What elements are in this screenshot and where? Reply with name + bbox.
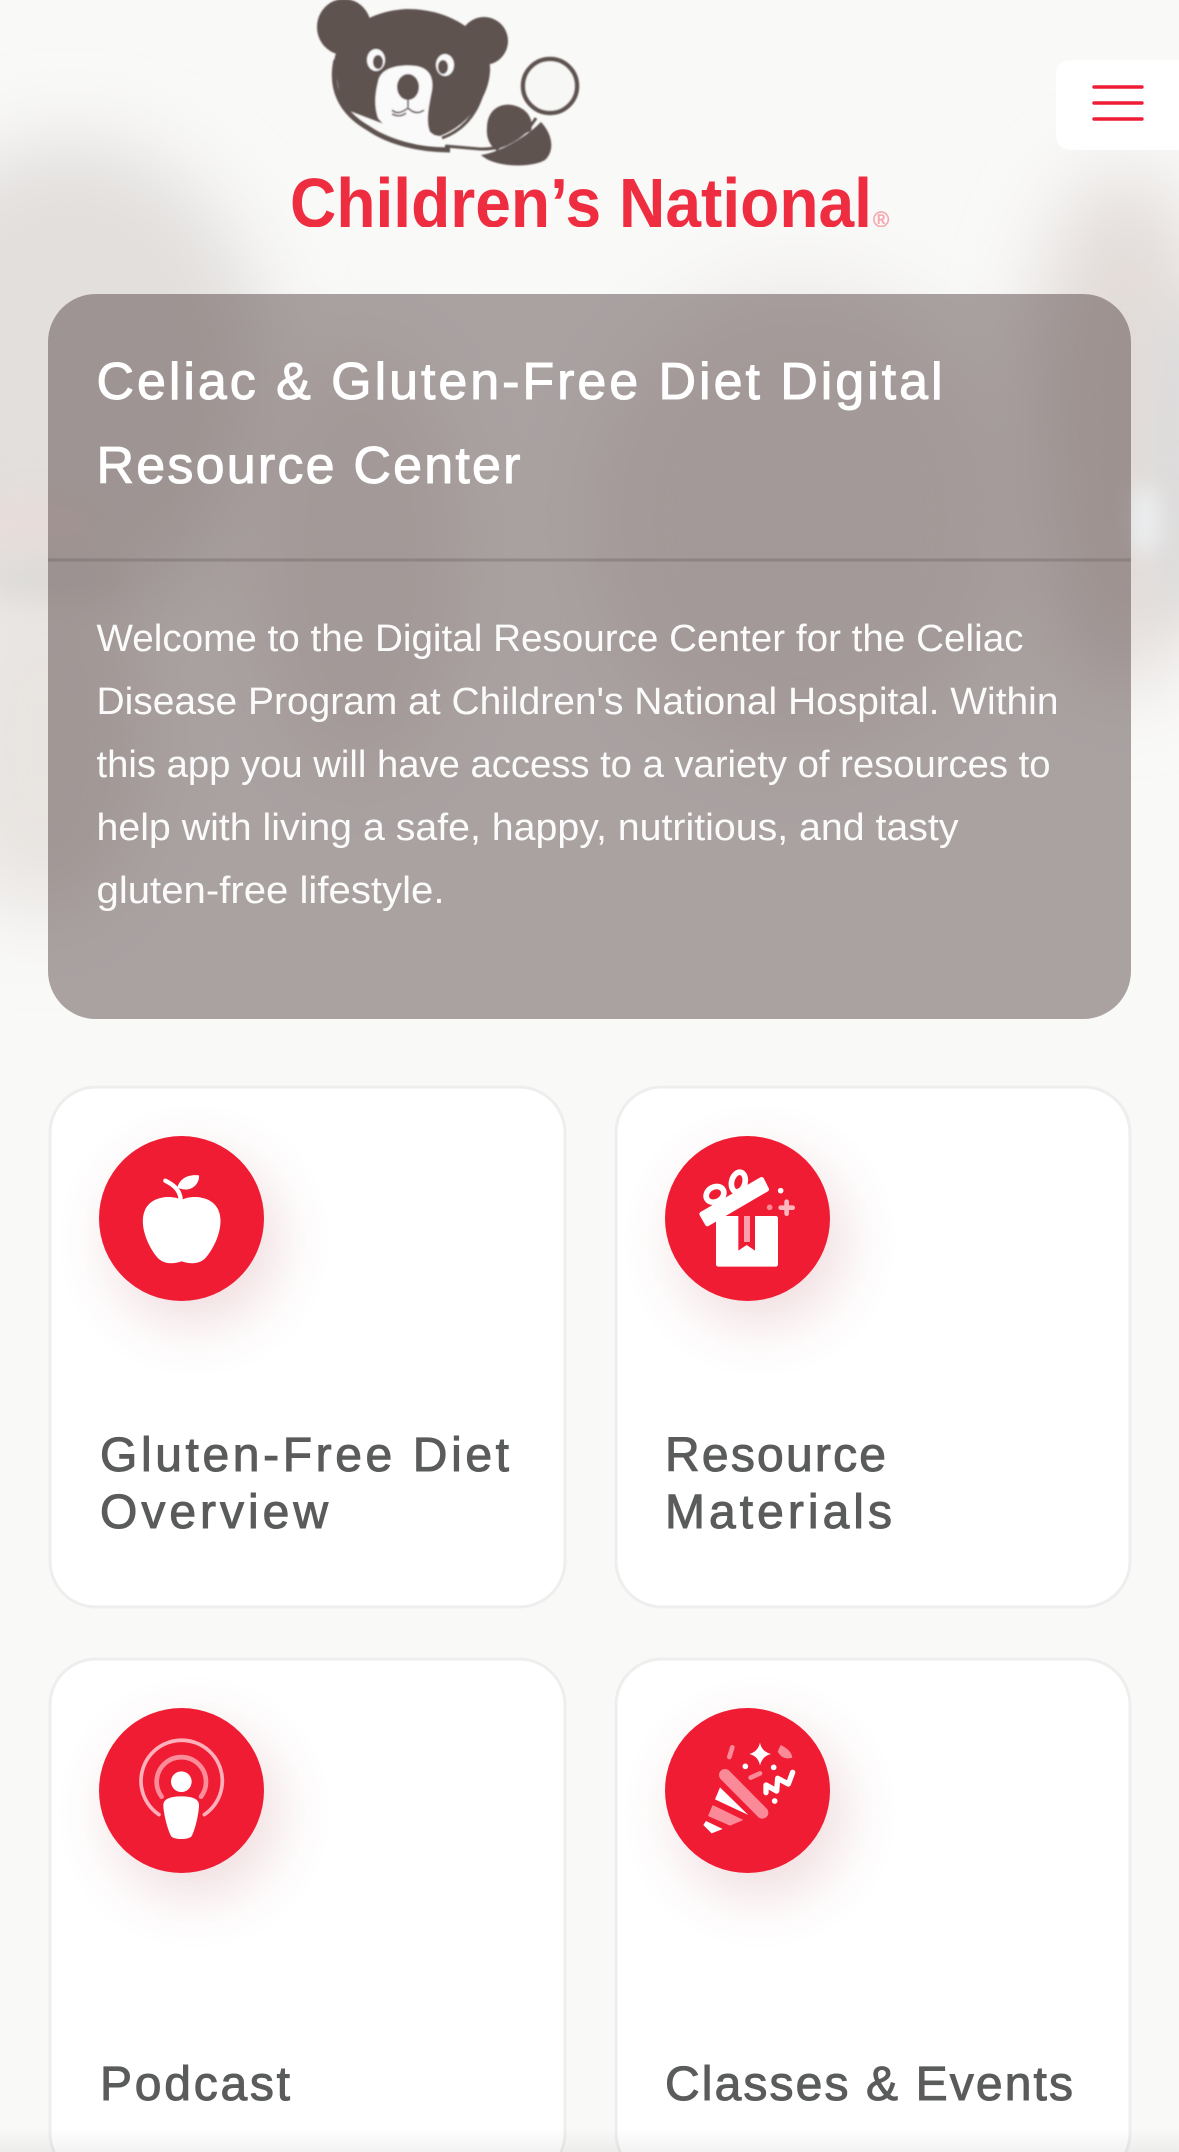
- text block: welcome message: Disease Program at Children's National Hospital. Within: [96, 681, 1058, 723]
- card: Gluten-Free Diet Overview: [50, 1087, 565, 1607]
- logo wordmark: Children’s National: [290, 164, 872, 242]
- text block: welcome message: [96, 618, 1058, 912]
- icon: podcast: [141, 1740, 222, 1839]
- logo: Children's National: [290, 0, 889, 242]
- heading: resource center title: [96, 353, 942, 495]
- icon: open gift box: [702, 1171, 793, 1267]
- bear paws: [487, 105, 532, 151]
- card title: Gluten-Free Diet: [100, 1429, 509, 1482]
- card: Podcast: [50, 1659, 565, 2152]
- heading: resource center title: Resource Center: [96, 437, 520, 495]
- card title: Podcast: [100, 2058, 290, 2111]
- heading: resource center title: Celiac & Gluten-Free Diet Digital: [96, 353, 942, 411]
- icon: apple: [143, 1175, 221, 1263]
- card title: [100, 1429, 509, 1539]
- card title: Classes & Events: [665, 2058, 1073, 2111]
- registered mark: ®: [873, 207, 889, 232]
- icon: bear with stethoscope: [317, 0, 577, 165]
- icon: party popper: [703, 1743, 793, 1833]
- card title: Overview: [100, 1486, 328, 1539]
- stethoscope disc: [523, 59, 577, 113]
- card title: Materials: [665, 1486, 892, 1539]
- panel: welcome: [48, 294, 1131, 1019]
- card title: Resource: [665, 1429, 886, 1482]
- text block: welcome message: Welcome to the Digital Resource Center for the Celiac: [96, 618, 1024, 660]
- icon: hamburger menu: [1094, 87, 1142, 119]
- text block: welcome message: this app you will have access to a variety of resources to: [96, 744, 1050, 786]
- menu button: [1056, 60, 1179, 150]
- text block: welcome message: help with living a safe, happy, nutritious, and tasty: [96, 807, 958, 849]
- card: Resource Materials: [616, 1087, 1130, 1607]
- card: Classes & Events: [616, 1659, 1130, 2152]
- card title: [665, 1429, 892, 1539]
- text block: welcome message: gluten-free lifestyle.: [96, 870, 444, 912]
